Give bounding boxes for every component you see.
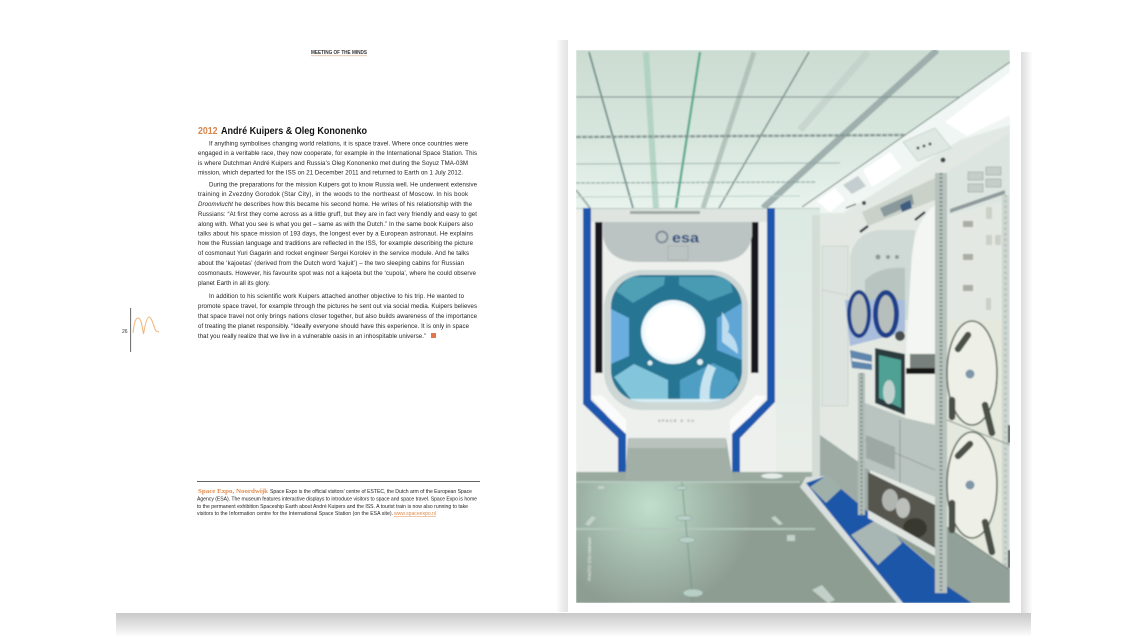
arch recess with electronics strip: [822, 178, 935, 406]
lower cavity with equipment: [868, 472, 935, 556]
article body text: of cosmonaut Yuri Gagarin and rocket engineer Sergei Korolev in the service module. And he talks: [198, 250, 469, 257]
article title: 2012: [198, 125, 218, 137]
article title: André Kuipers & Oleg Kononenko: [221, 125, 367, 137]
article body text: [198, 140, 478, 340]
article body text: During the preparations for the mission Kuipers got to know Russia well. He underwent extensive: [209, 182, 478, 188]
article body text: Droomvlucht he describes how this became his second home. He writes of his relationship with the: [198, 201, 473, 208]
article body text: Russians: “At first they come across as a little gruff, but they are in fact very friendly and easy to get: [198, 211, 477, 218]
portholes on blue panel: [845, 290, 905, 346]
esa logo: [656, 230, 699, 246]
article body text: engaged in a veritable race, they now cooperate, for example in the International Space Station. This: [198, 150, 477, 157]
floor: [576, 438, 936, 603]
article body text: planet Earth in all its glory.: [198, 280, 270, 287]
article body text: In addition to his scientific work Kuipers attached another objective to his trip. He wanted to: [209, 293, 465, 300]
photo credit: PHOTO: ESA Meinster: [587, 537, 592, 581]
circular hatch discs: [947, 320, 1010, 570]
sidebar: Space Expo, Noordwijk: Agency (ESA). The museum features interactive displays to introduce visitors to space and space travel. Space Expo is home: [197, 496, 477, 502]
esa logo: esa: [672, 230, 699, 246]
hatch cover: [603, 222, 752, 262]
article body text: along with. What you see is what you get – same as with the Dutch.” In the same book Kuipers also: [198, 221, 474, 228]
rack instruments: [850, 348, 935, 497]
ceiling with rails: [576, 50, 1010, 209]
right wall base: [811, 215, 1010, 570]
upper right wall panels: [949, 166, 1010, 568]
folio: page number and logo: 26: [122, 329, 128, 335]
sidebar: Space Expo, Noordwijk: to the permanent exhibition Spaceship Earth about André Kuipers and the ISS. A tourist train is now also running to take: [197, 504, 468, 510]
sidebar: Space Expo, Noordwijk: www.spaceexpo.nl: [394, 511, 436, 517]
steps: [624, 440, 732, 473]
article body text: that space travel not only brings nations closer together, but also builds awareness of the importance: [198, 313, 478, 320]
gray skirting right: [946, 585, 969, 602]
article body text: If anything symbolises changing world relations, it is space travel. Where once countries were: [209, 140, 469, 148]
vertical rails: [858, 173, 947, 593]
article body text: that you really realize that we live in a vulnerable oasis in an inhospitable universe.”: [198, 333, 426, 340]
article body text: about the ‘kajoetas’ (derived from the Dutch word ‘kajuit’) – the two sleeping cabins for Russian: [198, 260, 464, 267]
hatch wall: [576, 208, 820, 473]
folio: page number and logo: [122, 308, 159, 352]
article body text: cosmonauts. However, his favourite spot was not a kajoeta but the ‘cupola’, where he could observe: [198, 270, 477, 277]
article body text: talks about his space mission of 193 days, the longest ever by a European astronaut. He explains: [198, 230, 473, 238]
sidebar: Space Expo, Noordwijk: [197, 482, 480, 517]
running header: meeting of the minds: MEETING OF THE MINDS: [311, 50, 368, 56]
right upper lights: [800, 62, 1010, 213]
label: to cupola: TO CUPOLA: [659, 270, 694, 276]
floor fasteners: [675, 473, 783, 597]
article body text: mission, which departed for the ISS on 21 December 2011 and returned to Earth on 1 July 2012.: [198, 170, 463, 176]
back wall right of hatch: [800, 208, 820, 214]
article body text: training in Zvezdny Gorodok (Star City), in the woods to the northeast of Moscow. In his book: [198, 191, 469, 198]
photo: ISS module interior with cupola hatch: [576, 50, 1010, 603]
disc 2: [947, 432, 997, 552]
page drop shadows: [116, 52, 1033, 637]
disc 1: [947, 321, 997, 433]
sidebar: Space Expo, Noordwijk: Space Expo, Noordwijk: [198, 489, 269, 495]
chamfer panels: [591, 395, 767, 434]
black side bars: [595, 222, 758, 373]
spine gutter shading: [556, 40, 568, 612]
article body text: promote space travel, for example through the pictures he sent out via social media. Kuipers believes: [198, 303, 477, 310]
sidebar: Space Expo, Noordwijk: visitors to the Information centre for the International Space Station (on the ESA site).: [197, 511, 393, 517]
article body text: of treating the planet responsibly. “Ideally everyone should have this experience. It is only in space: [198, 323, 470, 330]
article body text: is where Dutchman André Kuipers and Russia’s Oleg Kononenko met during the Soyuz TMA-03M: [198, 160, 468, 167]
blue floor strip: [800, 475, 976, 603]
lower door label: SPACE E XU: [658, 418, 694, 423]
floor markings: [585, 486, 835, 603]
sidebar: Space Expo, Noordwijk: Space Expo is the official visitors’ centre of ESTEC, the Dutch arm of the European Space: [270, 489, 472, 495]
blue door trim: [583, 208, 775, 473]
cupola window: [604, 270, 748, 410]
article body text: how the Russian language and traditions are reflected in the ISS, for example describing the picture: [198, 240, 474, 247]
